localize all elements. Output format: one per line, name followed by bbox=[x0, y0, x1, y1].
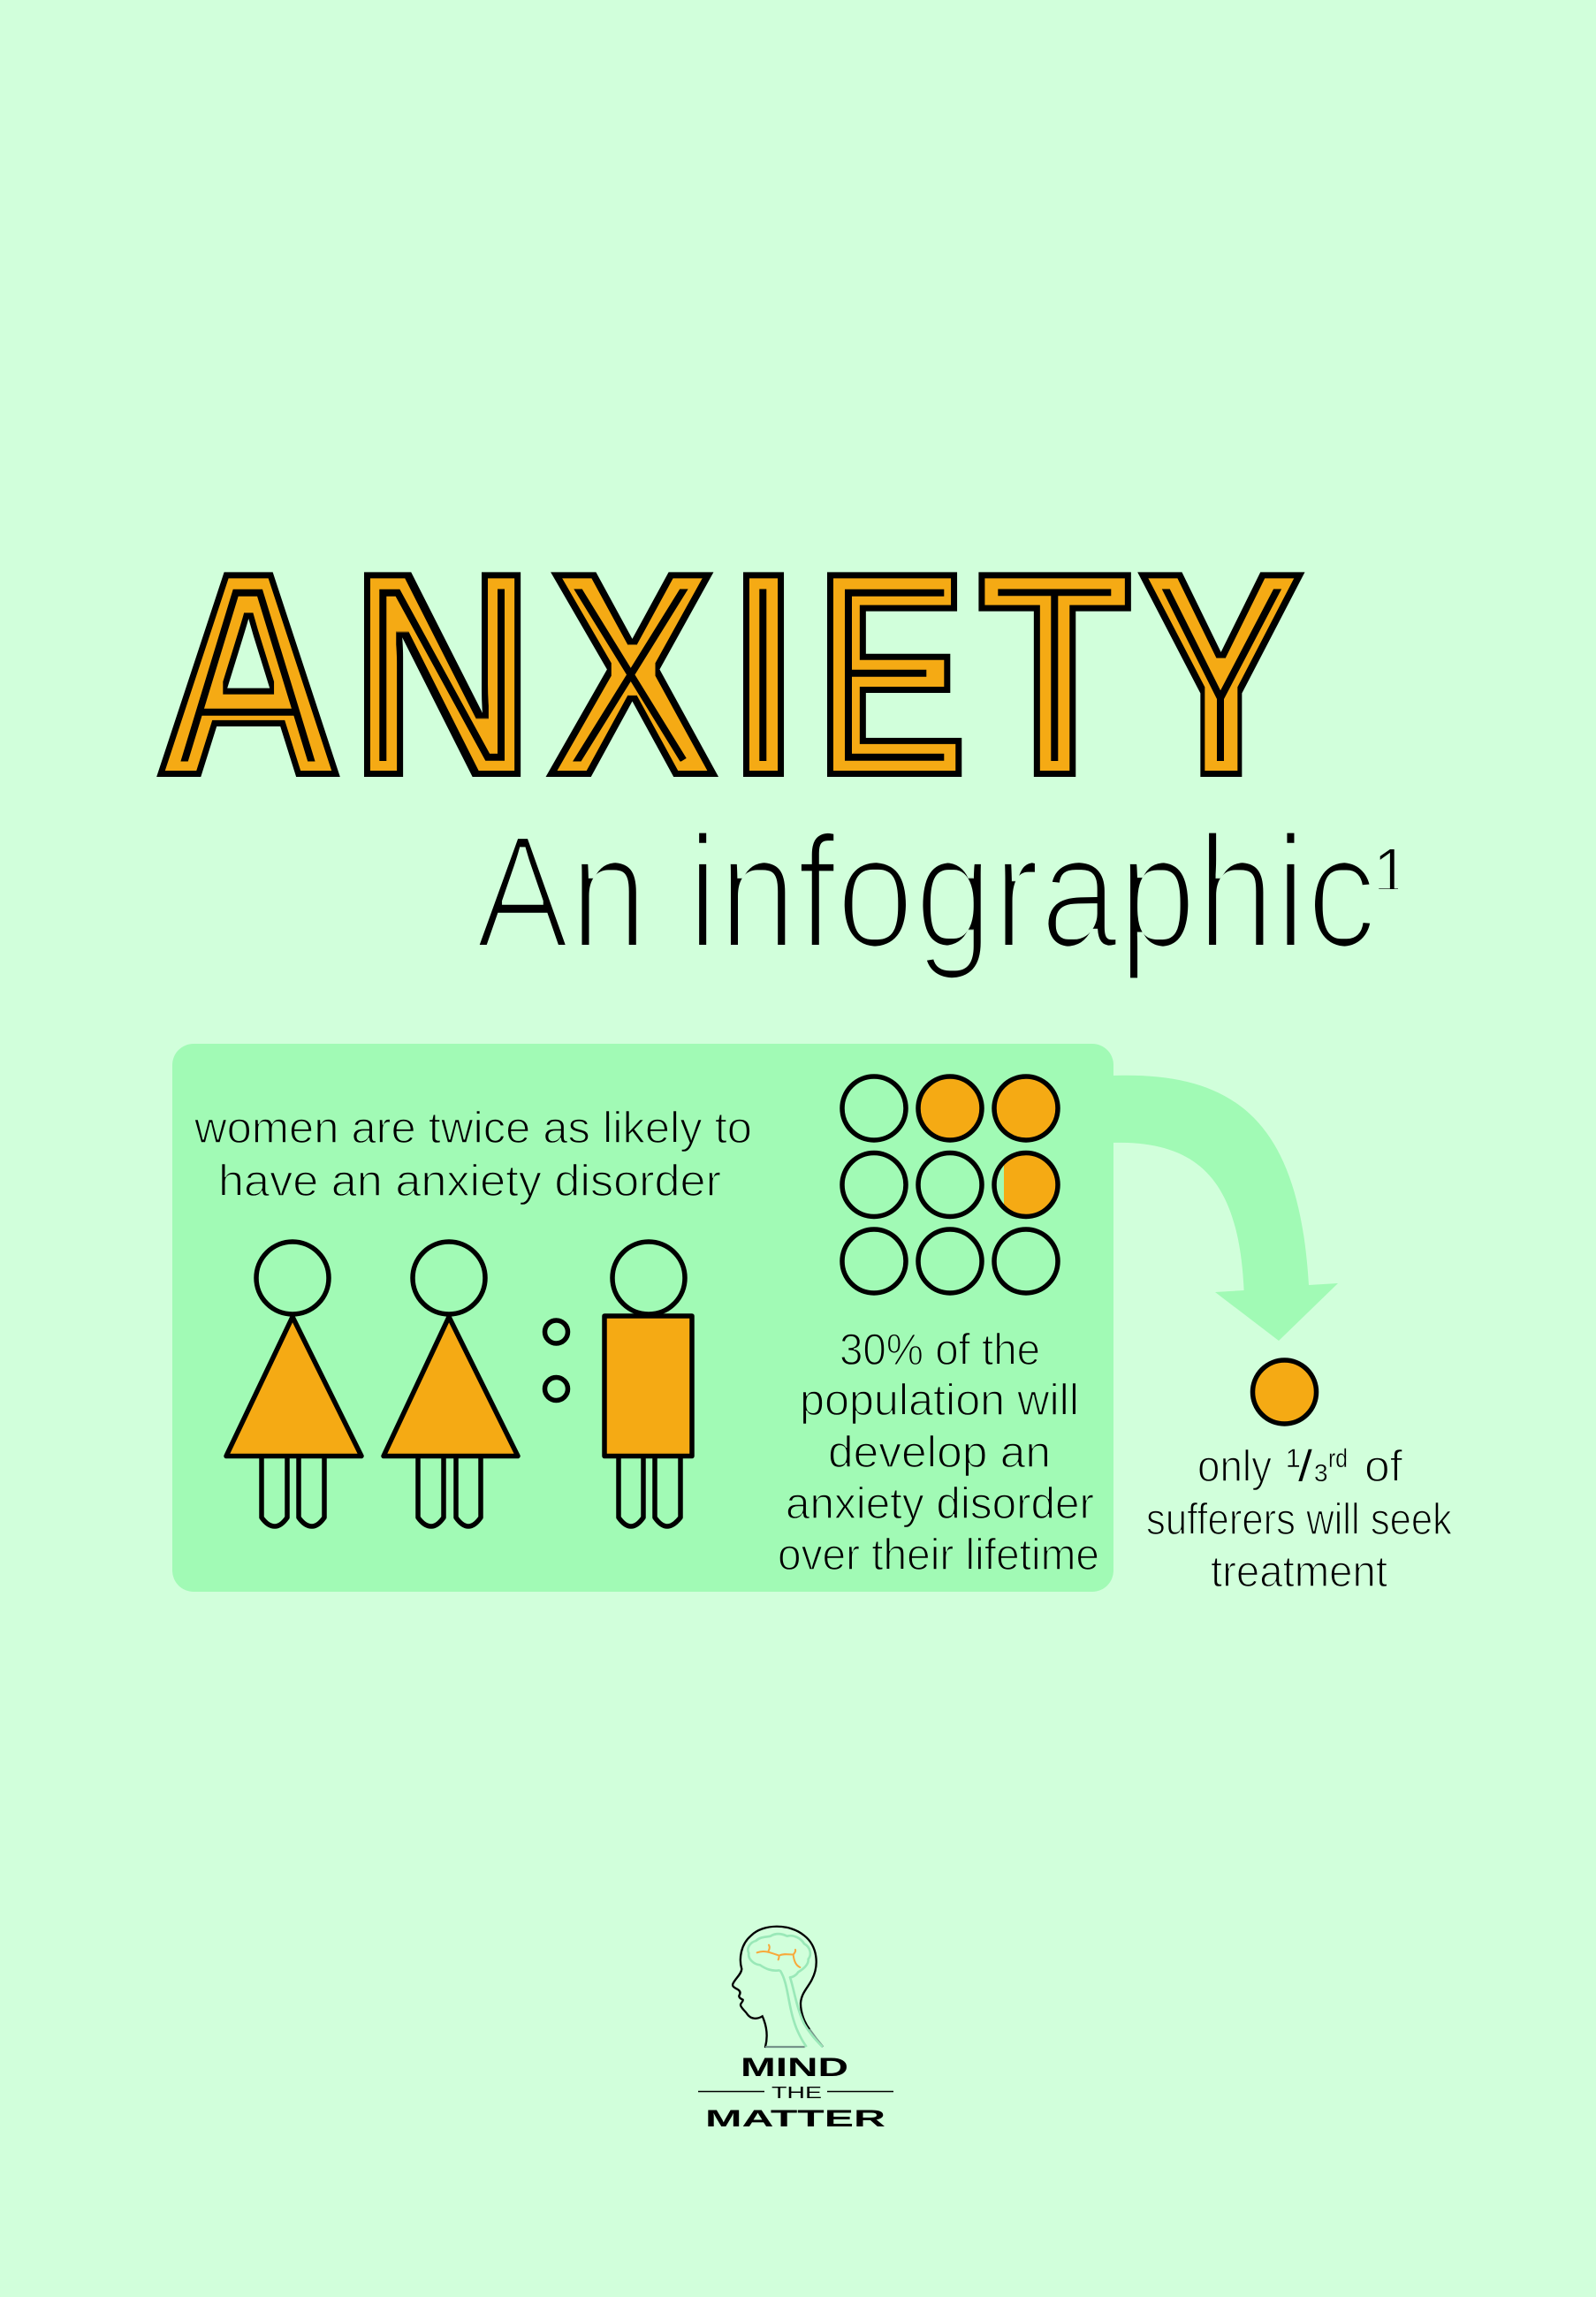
subtitle: An infographic: 1 bbox=[1373, 836, 1409, 907]
icon: head and brain bbox=[733, 1927, 823, 2047]
logo: mind the matter bbox=[698, 1927, 893, 2132]
text: 30 percent of the population: develop an bbox=[828, 1427, 1051, 1477]
ratio colon bbox=[544, 1320, 567, 1400]
text: women are twice as likely: have an anxiety disorder bbox=[218, 1156, 721, 1206]
text: 30 percent of the population: anxiety disorder bbox=[786, 1479, 1094, 1528]
text: only one third of sufferers: of bbox=[1364, 1441, 1402, 1491]
text: women are twice as likely: women are twice as likely to bbox=[194, 1103, 752, 1152]
text: only one third of sufferers: sufferers will seek bbox=[1146, 1495, 1453, 1544]
title: ANXIETY: T bbox=[979, 514, 1130, 835]
icon: woman 2 bbox=[384, 1242, 518, 1526]
chart: 30 percent circle grid bbox=[842, 1076, 1058, 1293]
text: only one third of sufferers: 3 bbox=[1314, 1459, 1328, 1487]
curved arrow bbox=[1112, 1076, 1338, 1341]
title: ANXIETY: I bbox=[730, 513, 797, 834]
text: 30 percent of the population: over their lifetime bbox=[778, 1530, 1099, 1579]
subtitle: An infographic: An infographic bbox=[475, 803, 1377, 981]
logo wordmark: THE bbox=[771, 2084, 822, 2102]
text: only one third of sufferers bbox=[1146, 1441, 1453, 1596]
text: only one third of sufferers: rd bbox=[1328, 1444, 1348, 1473]
panel: statistics bbox=[172, 1044, 1113, 1592]
icon: woman 1 bbox=[226, 1242, 361, 1526]
logo wordmark: MATTER bbox=[705, 2105, 885, 2132]
title: ANXIETY: E bbox=[815, 514, 968, 835]
text: 30 percent of the population: population will bbox=[800, 1375, 1079, 1425]
icon: one orange circle bbox=[1253, 1360, 1317, 1424]
title: ANXIETY: X bbox=[550, 514, 717, 834]
title: ANXIETY bbox=[156, 572, 1304, 777]
logo wordmark: MIND bbox=[741, 2053, 848, 2082]
title: ANXIETY: A bbox=[155, 513, 342, 834]
icon: man bbox=[604, 1242, 692, 1526]
title: ANXIETY: Y bbox=[1138, 514, 1303, 835]
text: only one third of sufferers: 1 bbox=[1286, 1444, 1301, 1473]
text: only one third of sufferers: treatment bbox=[1211, 1547, 1387, 1596]
text: women are twice as likely bbox=[194, 1103, 752, 1206]
text: only one third of sufferers: / bbox=[1298, 1441, 1312, 1491]
title: ANXIETY: N bbox=[350, 514, 535, 835]
text: only one third of sufferers: only bbox=[1197, 1441, 1272, 1491]
logo wordmark bbox=[698, 2053, 893, 2132]
text: 30 percent of the population: 30% of the bbox=[840, 1325, 1040, 1374]
text: 30 percent of the population bbox=[778, 1325, 1099, 1579]
